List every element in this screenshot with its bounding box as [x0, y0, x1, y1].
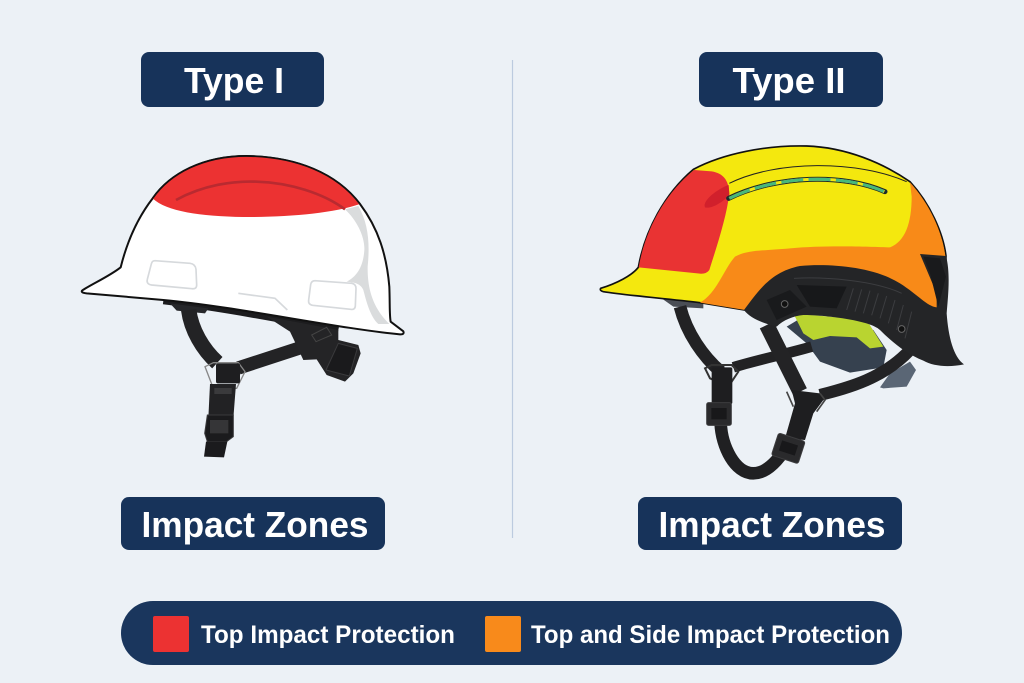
label: Impact Zones left	[121, 497, 385, 550]
side pads	[147, 261, 356, 310]
helmet: Type I	[82, 156, 404, 457]
shell	[82, 156, 404, 334]
rear ridge shading	[345, 206, 389, 324]
helmet: Type II	[600, 146, 964, 473]
orange side zone	[700, 182, 945, 310]
heading: Type II	[699, 52, 883, 107]
legend label: top impact: Top Impact Protection	[201, 621, 455, 649]
red top impact zone	[153, 156, 360, 217]
interior padding and adjuster	[787, 313, 916, 388]
heading: Type I	[141, 52, 324, 107]
label: Impact Zones right: Impact Zones	[658, 504, 886, 545]
heading: Type I: Type I	[184, 60, 284, 101]
heading: Type II: Type II	[732, 60, 846, 101]
legend swatch: top and side impact	[485, 616, 521, 652]
shell	[600, 146, 946, 310]
red front zone	[639, 170, 729, 274]
black lower rear guard	[744, 254, 964, 366]
label: Impact Zones right	[638, 497, 902, 550]
crown groove and vent strip	[729, 166, 907, 198]
chin strap and rear adjuster	[163, 301, 361, 457]
straps and buckles	[662, 298, 910, 473]
legend	[121, 601, 902, 665]
legend swatch: top impact	[153, 616, 189, 652]
legend label: top and side impact: Top and Side Impact Protection	[531, 621, 890, 649]
label: Impact Zones left: Impact Zones	[142, 504, 368, 545]
